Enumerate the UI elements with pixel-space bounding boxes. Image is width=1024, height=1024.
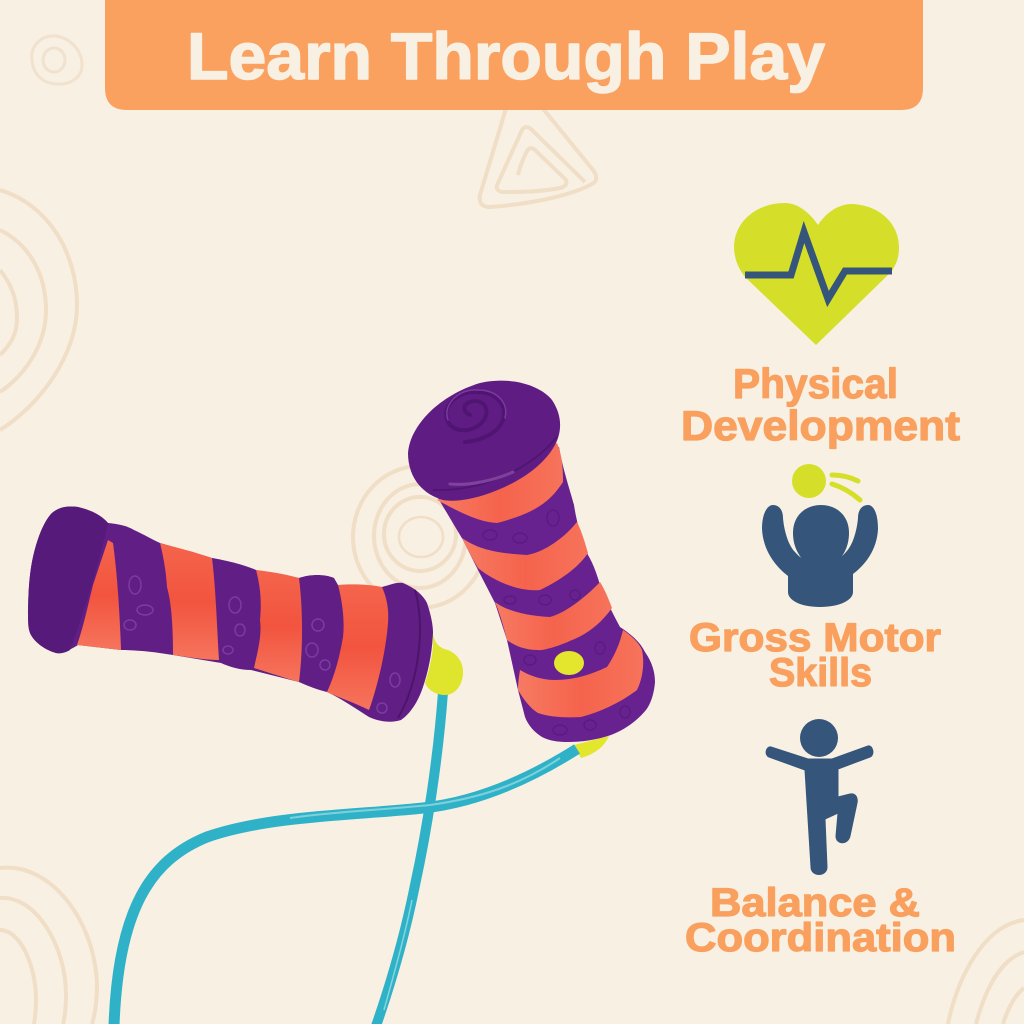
heading: gross motor skills [689,616,941,695]
heading: physical development [681,360,960,449]
heading: physical development: Physical [733,360,898,407]
icon: heart with pulse [734,203,899,345]
heading: balance and coordination [685,881,956,960]
left handle end seam [398,590,420,718]
right handle [408,381,655,742]
icon: person catching ball [762,464,878,607]
yellow button [554,651,584,675]
right handle top cap [408,381,560,501]
heading: balance and coordination: Balance & [710,881,920,925]
small yellow tip [574,736,609,758]
heading: physical development: Development [681,402,960,449]
yellow knob [425,635,463,695]
left handle [28,507,433,722]
cap spiral [446,390,506,442]
right handle purple body [438,447,655,742]
heading: gross motor skills: Skills [769,651,872,695]
title: Learn Through Play [187,19,825,93]
cap rim [433,437,557,490]
title banner [105,0,923,110]
heading: balance and coordination: Coordination [685,916,956,960]
rope [114,692,577,1024]
left handle red stripes [77,540,388,710]
right handle red stripes [437,443,643,717]
left handle cap shade [28,507,108,653]
left handle texture [124,576,400,713]
heading: gross motor skills: Gross Motor [689,616,941,660]
icon: balancing person [766,719,873,874]
left handle purple body [28,507,433,722]
right handle texture [483,510,630,735]
